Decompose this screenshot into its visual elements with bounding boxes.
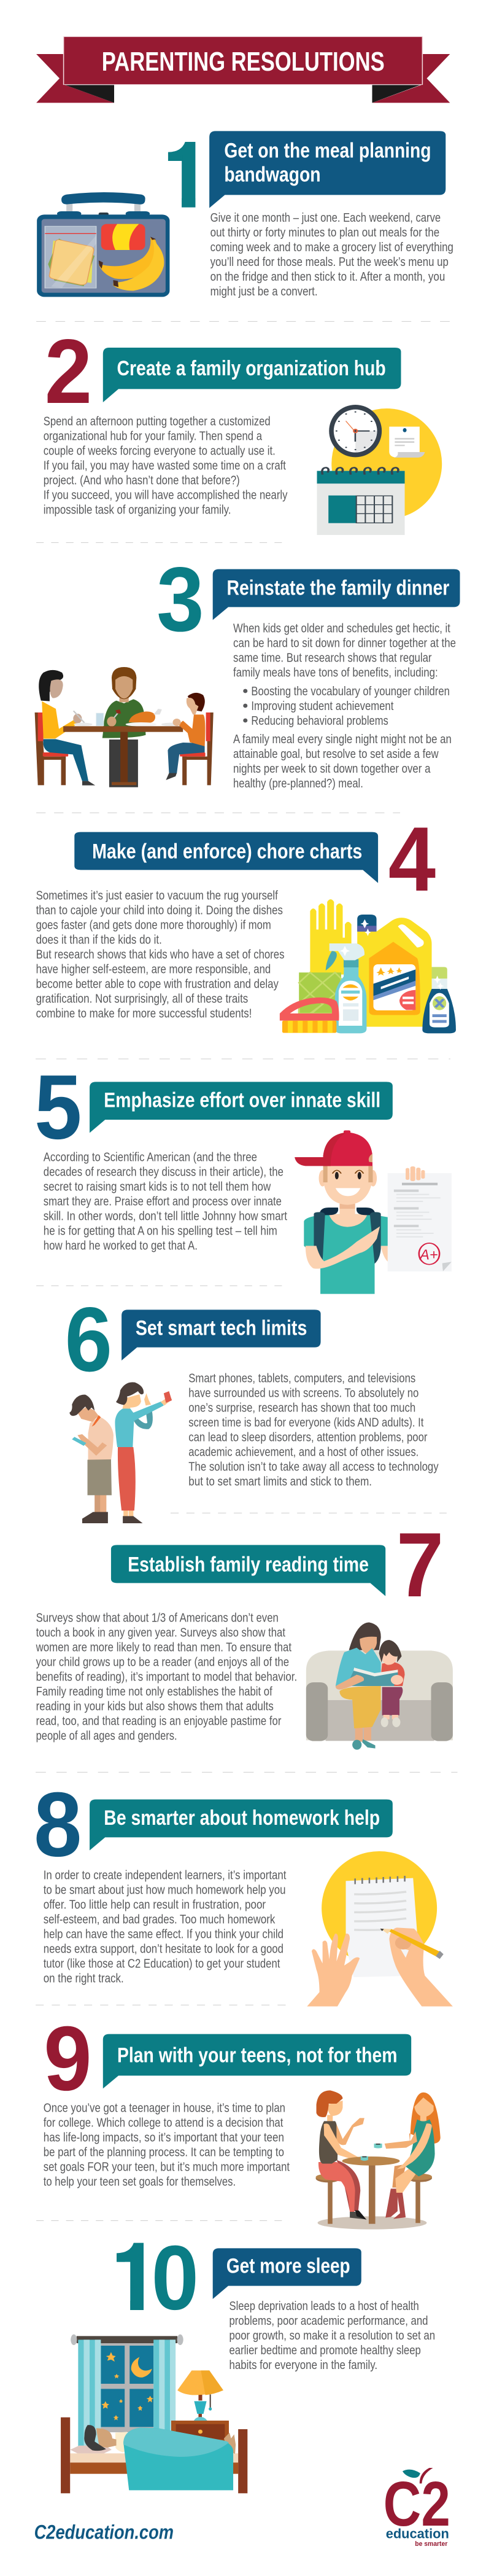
body text 4: Sometimes it’s just easier to vacuum the rug yourself <box>36 889 278 902</box>
number 3: 3 <box>156 548 204 650</box>
panel: title and section 1 <box>36 37 453 299</box>
heading bubble 7 <box>111 1545 385 1596</box>
body text 9: has life-long impacts, so it’s important that your teen <box>44 2131 284 2144</box>
number 8: 8 <box>34 1773 82 1876</box>
body text 2: couple of weeks forcing everyone to actually use it. <box>44 444 276 458</box>
title banner <box>36 37 450 103</box>
body text 2: If you succeed, you will have accomplished the nearly <box>44 488 288 502</box>
illustration: sleeping in bed by a window <box>61 2335 247 2493</box>
body text 9: Once you’ve got a teenager in house, it’s time to plan <box>44 2102 285 2115</box>
logo: C2 education apple <box>384 2468 450 2547</box>
body text 7: women are more likely to read than men. To ensure that <box>36 1641 291 1654</box>
body text 5 <box>44 1151 287 1252</box>
heading bubble 8 <box>90 1800 393 1851</box>
heading bubble 1: bandwagon <box>224 163 321 186</box>
body text 5: he is for getting that A on his spelling test – tell him <box>44 1225 277 1238</box>
panel: section 5 <box>34 1056 452 1294</box>
illustration: two teens at a cafe table <box>315 2090 441 2230</box>
body text 5: smart they are. Praise effort and process over innate <box>44 1195 282 1208</box>
heading bubble 1 <box>209 131 446 208</box>
heading bubble 10 <box>213 2248 361 2299</box>
panel: section 6 <box>65 1288 447 1523</box>
number 1 <box>168 142 195 208</box>
illustration: boy with graded test: A+ <box>419 1247 438 1263</box>
number 2: 2 <box>45 320 92 423</box>
body text 7: touch a book in any given year. Surveys also show that <box>36 1626 285 1639</box>
illustration: mother and child reading on a sofa <box>306 1622 453 1750</box>
body text 6 <box>188 1372 439 1488</box>
body text 5: According to Scientific American (and the three <box>44 1151 257 1164</box>
heading bubble 10: Get more sleep <box>226 2254 350 2277</box>
logo: C2 education apple: be smarter <box>415 2540 448 2547</box>
panel: section 2 <box>36 320 450 542</box>
number 10 <box>117 2243 195 2311</box>
body text 3: healthy (pre-planned?) meal. <box>233 777 363 790</box>
body text 9: be part of the planning process. It can be tempting to <box>44 2146 284 2159</box>
body text 7: reading in your kids but also shows them that adults <box>36 1700 274 1713</box>
body text 4: gratification. Not surprisingly, all of these traits <box>36 993 248 1005</box>
heading bubble 5 <box>90 1082 393 1133</box>
number 9: 9 <box>44 2007 92 2110</box>
body text 4: But research shows that kids who have a set of chores <box>36 948 284 961</box>
body text 5: secret to raising smart kids is to not tell them how <box>44 1181 271 1193</box>
heading bubble 6 <box>122 1309 321 1360</box>
number 4: 4 <box>388 808 436 910</box>
body text 7 <box>36 1612 297 1743</box>
body text 8: In order to create independent learners, it’s important <box>44 1869 286 1882</box>
body text 9 <box>44 2102 290 2188</box>
body text 8: to be smart about just how much homework help you <box>44 1884 285 1897</box>
icon: lunchbox <box>37 192 169 297</box>
body text 7: Family reading time not only establishes the habit of <box>36 1685 272 1698</box>
body text 5: decades of research they discuss in their article), the <box>44 1166 284 1179</box>
body text 2: impossible task of organizing your family. <box>44 503 231 517</box>
number 5: 5 <box>34 1056 82 1158</box>
body text 8: on the right track. <box>44 1972 124 1985</box>
body text 8: needs extra support, don’t hesitate to look for a good <box>44 1943 284 1956</box>
body text 9: set goals FOR your teen, but it’s much more important <box>44 2161 290 2174</box>
heading bubble 9 <box>103 2034 411 2088</box>
body text 4: goes faster (and gets done more thoroughly) if mom <box>36 919 271 932</box>
body text 3 <box>233 622 456 790</box>
body text 2: organizational hub for your family. Then spend a <box>44 429 263 443</box>
body text 8: tutor (like those at C2 Education) to get your student <box>44 1957 280 1970</box>
body text 10 <box>229 2300 435 2372</box>
body text 8: offer. Too little help can result in frustration, poor <box>44 1899 266 1911</box>
panel: section 4 <box>36 808 456 1033</box>
panel: section 7 <box>36 1513 457 1772</box>
body text 8: self-esteem, and bad grades. Too much homework <box>44 1913 275 1926</box>
body text 2: If you fail, you may have wasted some time on a craft <box>44 459 286 472</box>
number 1: 1 <box>163 125 210 227</box>
panel: section 10 and footer <box>34 2300 450 2547</box>
illustration: hands writing on notepad <box>307 1851 453 2007</box>
icon: clock, note and calendar <box>317 405 442 535</box>
body text 8: help can have the same effect. If you think your child <box>44 1928 284 1941</box>
heading bubble 4 <box>74 832 378 883</box>
heading bubble 3 <box>213 569 460 620</box>
logo: C2 education apple: education <box>386 2526 449 2541</box>
illustration: boy with graded test <box>295 1130 452 1294</box>
body text 9: to help your teen set goals for themselves. <box>44 2176 236 2188</box>
body text 5: skill. In other words, don’t tell little Johnny how smart <box>44 1210 287 1223</box>
body text 1 <box>210 211 453 299</box>
body text 8 <box>44 1869 286 1985</box>
body text 4: does it than if the kids do it. <box>36 934 162 946</box>
body text 9: for college. Which college to attend is a decision that <box>44 2117 283 2129</box>
body text 7: your child grows up to be a reader (and enjoys all of the <box>36 1656 289 1669</box>
number 10: 0 <box>152 2227 199 2329</box>
body text 2 <box>44 415 288 517</box>
number 10: 1 <box>112 2227 158 2330</box>
panel: section 9 <box>36 2026 441 2311</box>
footer url: C2education.com <box>34 2521 174 2543</box>
heading bubble 2 <box>103 348 401 402</box>
illustration: family dinner <box>35 667 214 787</box>
panel: section 8 <box>34 1773 453 2007</box>
body text 5: how hard he worked to get that A. <box>44 1239 198 1252</box>
body text 4: have higher self-esteem, are more responsible, and <box>36 963 271 976</box>
body text 2: Spend an afternoon putting together a customized <box>44 415 271 428</box>
number 6: 6 <box>65 1288 112 1391</box>
body text 7: read, too, and that reading is an enjoyable pastime for <box>36 1715 282 1728</box>
body text 4: become better able to cope with frustration and delay <box>36 978 279 991</box>
body text 4: than to cajole your child into doing it. Doing the dishes <box>36 904 283 917</box>
body text 7: Surveys show that about 1/3 of Americans don’t even <box>36 1612 279 1625</box>
body text 2: project. (And who hasn’t done that before?) <box>44 474 240 487</box>
panel: section 3 <box>35 548 460 790</box>
illustration: boy and woman on phones <box>69 1382 172 1523</box>
body text 1: might just be a convert. <box>210 285 318 299</box>
body text 4: combine to make for more successful students! <box>36 1007 252 1020</box>
number 7: 7 <box>396 1513 444 1616</box>
heading bubble 6: Set smart tech limits <box>136 1316 307 1340</box>
icon: cleaning supplies <box>280 899 456 1033</box>
body text 4 <box>36 889 284 1020</box>
body text 7: people of all ages and genders. <box>36 1730 177 1743</box>
